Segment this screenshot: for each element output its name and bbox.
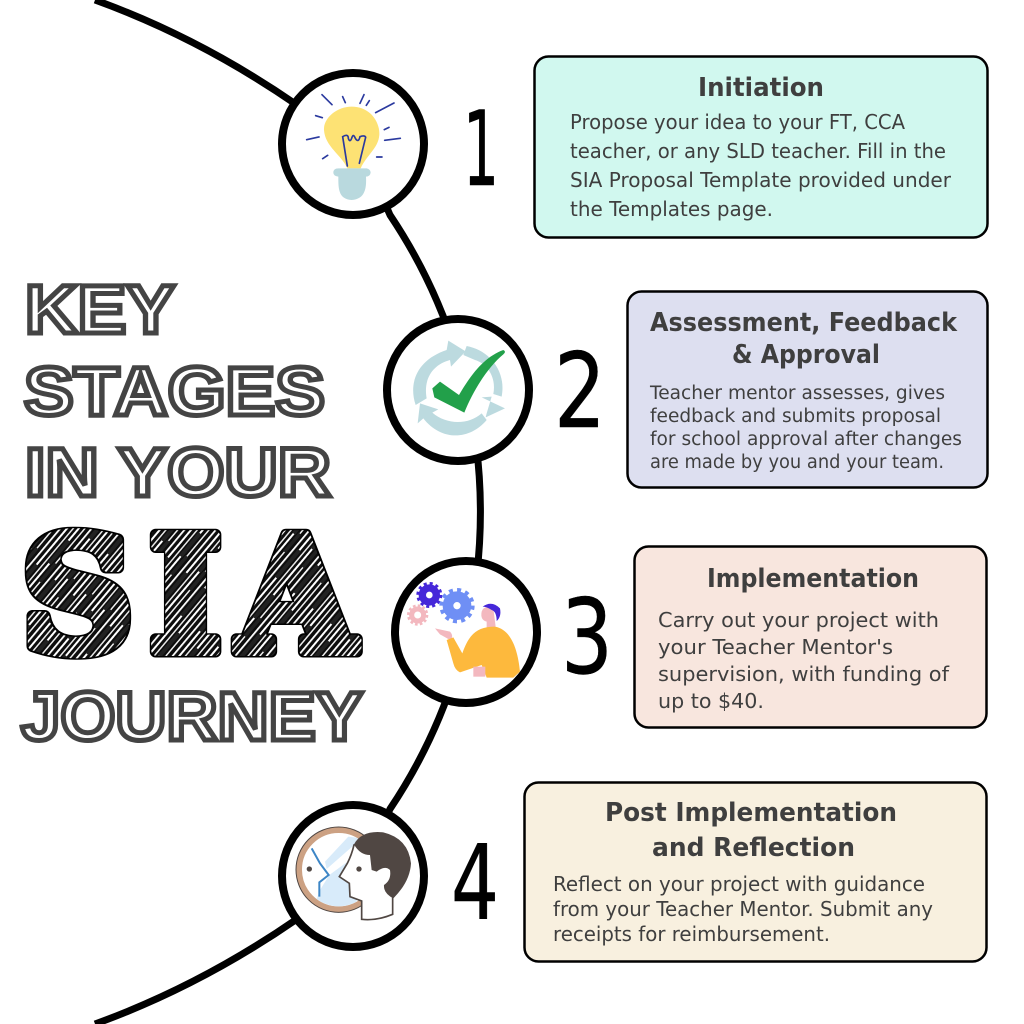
title: JOURNEY	[21, 678, 363, 755]
body text: assessment: for school approval after changes	[650, 429, 962, 450]
body text: post implementation: from your Teacher Mentor. Submit any	[553, 897, 933, 921]
number 4: 4	[451, 824, 499, 944]
number 3: 3	[561, 578, 613, 698]
panel: post implementation	[524, 782, 986, 962]
stage 3 circle with person and gears icon	[395, 561, 537, 703]
stage 2 circle with check icon	[387, 319, 529, 461]
body text: implementation: Carry out your project with	[658, 608, 939, 632]
panel: implementation	[634, 546, 986, 728]
panel: initiation	[534, 56, 988, 238]
body text: assessment: are made by you and your team.	[650, 452, 944, 473]
title: KEY	[25, 271, 175, 348]
body text: post implementation: receipts for reimbursement.	[553, 922, 830, 946]
number 2: 2	[554, 332, 606, 452]
title: S	[22, 504, 133, 687]
journey arc	[95, 0, 480, 1024]
heading: assessment: Assessment, Feedback	[650, 308, 958, 338]
body text: initiation: SIA Proposal Template provided under	[570, 168, 952, 192]
body text: implementation	[658, 608, 950, 713]
title	[21, 271, 363, 755]
body text: initiation: teacher, or any SLD teacher. Fill in the	[570, 139, 946, 163]
heading: post implementation	[605, 798, 897, 863]
body text: implementation: your Teacher Mentor's	[658, 635, 893, 659]
heading: assessment: & Approval	[732, 340, 880, 370]
number 1: 1	[463, 90, 499, 210]
body text: implementation: supervision, with funding of	[658, 662, 950, 686]
body text: implementation: up to $40.	[658, 689, 764, 713]
title: A	[237, 504, 356, 687]
stage 1 circle with light bulb icon	[282, 73, 424, 215]
body text: post implementation	[553, 872, 933, 946]
body text: assessment	[649, 383, 962, 473]
body text: assessment: Teacher mentor assesses, gives	[649, 383, 945, 404]
title: IN YOUR	[25, 434, 331, 511]
heading: post implementation: and Reflection	[652, 833, 855, 863]
heading: post implementation: Post Implementation	[605, 798, 897, 828]
heading: assessment	[650, 308, 958, 370]
heading: implementation: Implementation	[707, 564, 919, 594]
stage 4 circle with mirror reflection icon	[282, 805, 424, 947]
body text: initiation: the Templates page.	[570, 197, 773, 221]
body text: initiation	[570, 110, 952, 221]
body text: initiation: Propose your idea to your FT, CCA	[570, 110, 905, 134]
body text: assessment: feedback and submits proposal	[650, 406, 941, 427]
title: STAGES	[24, 353, 325, 430]
panel: assessment	[628, 292, 988, 488]
title: I	[150, 504, 221, 687]
heading: initiation: Initiation	[698, 73, 824, 103]
body text: post implementation: Reflect on your project with guidance	[553, 872, 925, 896]
